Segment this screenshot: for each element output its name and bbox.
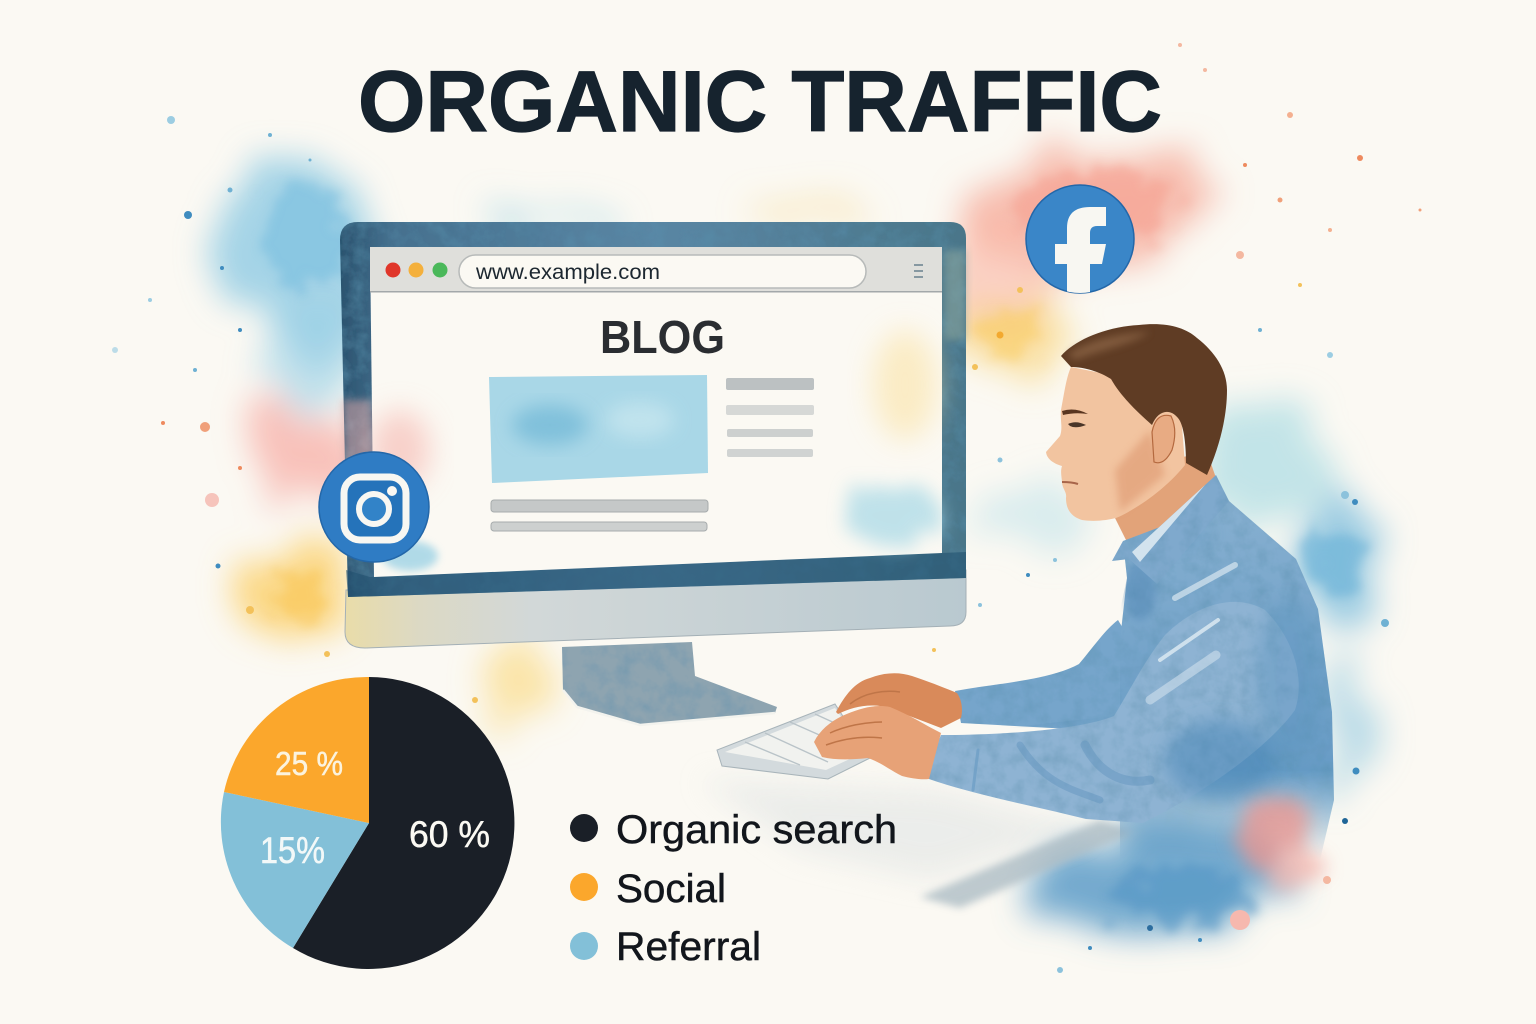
blog image placeholder xyxy=(489,375,708,483)
slice: referral 15% xyxy=(221,792,369,948)
screen wash xyxy=(370,330,940,571)
slice: organic search 60% xyxy=(293,677,514,969)
browser toolbar xyxy=(370,247,942,292)
bezel shading xyxy=(342,250,966,597)
person xyxy=(814,324,1334,860)
sleeve folds xyxy=(973,565,1235,800)
keyboard xyxy=(717,704,870,779)
icon: facebook xyxy=(1026,185,1134,300)
ink splatter dots xyxy=(112,43,1422,973)
legend: referral: Referral xyxy=(616,925,761,969)
label 15%: 15% xyxy=(260,830,325,871)
far forearm and sleeve xyxy=(955,620,1130,732)
legend xyxy=(570,808,897,969)
desk xyxy=(700,780,1135,908)
slice: social 25% xyxy=(224,677,369,823)
label 25%: 25 % xyxy=(275,745,343,782)
sleeve shading xyxy=(1013,528,1323,807)
monitor bezel xyxy=(340,222,966,597)
label 60%: 60 % xyxy=(409,814,490,855)
pie chart xyxy=(221,677,514,969)
mouth xyxy=(1062,482,1078,484)
monitor xyxy=(340,222,966,725)
url text: www.example.com xyxy=(475,261,660,284)
near hand xyxy=(814,706,941,779)
article text lines xyxy=(491,500,708,531)
face xyxy=(1046,367,1185,521)
window buttons xyxy=(386,262,448,278)
address bar xyxy=(459,255,866,288)
icon: instagram xyxy=(319,452,429,562)
eyebrow and eye xyxy=(1062,410,1088,427)
collar xyxy=(1112,475,1229,584)
legend: social xyxy=(570,867,726,911)
watercolor wash: pink over lower shirt xyxy=(1239,797,1325,890)
monitor stand xyxy=(562,642,777,725)
finger lines xyxy=(826,691,900,745)
shirt inner collar xyxy=(1132,485,1205,562)
cheek shadow xyxy=(1115,430,1165,512)
near arm sleeve xyxy=(929,602,1299,823)
torso shirt xyxy=(1120,501,1334,860)
neck xyxy=(1114,452,1216,552)
legend: social: Social xyxy=(616,867,726,911)
hair xyxy=(1061,324,1227,475)
blog heading: BLOG xyxy=(600,311,725,363)
browser screen xyxy=(370,247,942,577)
far hand xyxy=(836,673,962,728)
watercolor washes xyxy=(215,150,1377,935)
sidebar text lines xyxy=(726,378,814,457)
ear xyxy=(1152,415,1175,463)
title: ORGANIC TRAFFIC xyxy=(358,54,1162,150)
legend: organic search: Organic search xyxy=(616,808,897,852)
monitor chin xyxy=(345,570,966,648)
menu icon xyxy=(914,265,923,277)
